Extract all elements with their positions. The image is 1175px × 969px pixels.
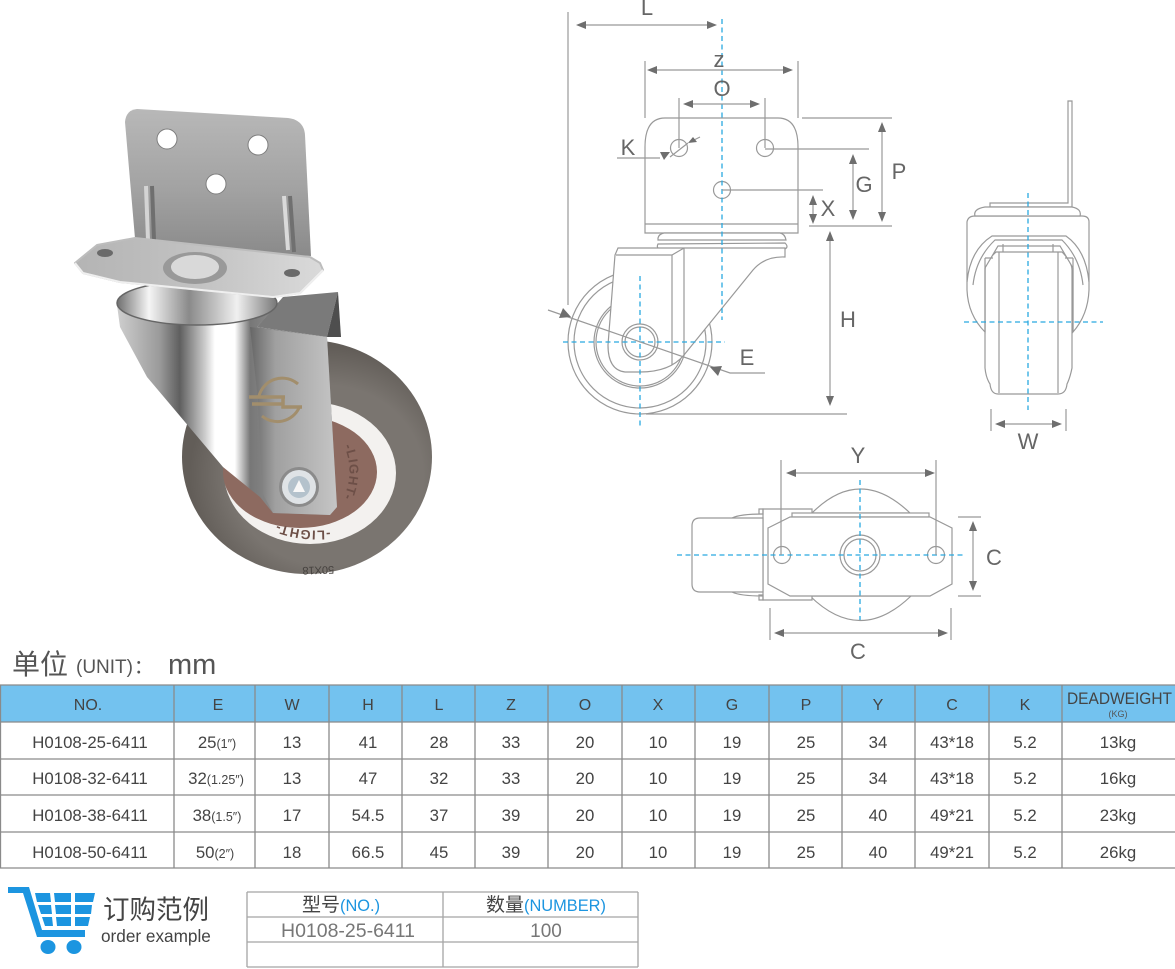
dimension G: G	[855, 172, 873, 197]
row H0108-50-6411: 20	[576, 843, 594, 862]
order table model value: H0108-25-6411	[281, 921, 415, 942]
base plate holes	[97, 249, 300, 277]
hub lettering lower: -LIGHT-	[276, 526, 330, 540]
row H0108-50-6411: 45	[430, 843, 448, 862]
side elevation drawing	[548, 0, 906, 426]
L bracket	[990, 101, 1072, 207]
plate strip	[792, 513, 929, 517]
front elevation drawing	[964, 101, 1103, 454]
row H0108-25-6411: 10	[649, 733, 667, 752]
hub lettering: -LIGHT-	[346, 445, 358, 498]
axle bolt	[279, 467, 319, 507]
order table grid	[247, 892, 638, 967]
table header labels: Z	[506, 697, 516, 714]
row H0108-25-6411: 33	[502, 733, 520, 752]
dimension C short	[958, 517, 1002, 596]
table header labels: L	[435, 697, 444, 714]
dimension O	[679, 76, 765, 148]
row H0108-50-6411: 66.5	[352, 843, 384, 862]
row H0108-25-6411: 19	[723, 733, 741, 752]
row H0108-25-6411: 13	[283, 733, 301, 752]
order example table	[247, 892, 638, 967]
dimension E: E	[740, 345, 754, 370]
top plan drawing	[677, 443, 1002, 664]
centre lines	[563, 19, 725, 426]
row H0108-38-6411: 23kg	[1100, 806, 1136, 825]
dimension H	[646, 231, 856, 414]
row H0108-32-6411: 25	[797, 769, 815, 788]
row H0108-50-6411: 40	[869, 843, 887, 862]
table header labels: NO.	[74, 697, 102, 714]
dimension H: H	[840, 307, 856, 332]
wheel	[985, 252, 1072, 394]
row H0108-25-6411: 34	[869, 733, 887, 752]
product photo: swivel caster	[74, 109, 432, 576]
table header labels: C	[946, 697, 958, 714]
axle bolt	[622, 324, 658, 360]
dimension G	[765, 149, 873, 220]
unit heading: (UNIT)	[76, 657, 133, 678]
row H0108-38-6411	[32, 806, 1136, 825]
row H0108-25-6411: 13kg	[1100, 733, 1136, 752]
unit heading: mm	[168, 649, 216, 681]
dimension W: W	[1018, 429, 1039, 454]
unit heading: 单位	[12, 649, 68, 680]
row H0108-50-6411: 19	[723, 843, 741, 862]
row H0108-50-6411: H0108-50-6411	[32, 843, 148, 862]
dimension C long: C	[850, 639, 866, 664]
plate holes	[157, 129, 268, 194]
order table header NUMBER: 数量(NUMBER)	[486, 894, 606, 916]
row H0108-32-6411	[32, 769, 1136, 788]
specification table	[0, 685, 1175, 868]
fork	[608, 248, 785, 372]
table header labels: Y	[873, 697, 884, 714]
table header labels: G	[726, 697, 738, 714]
plate fold line	[645, 223, 798, 225]
row H0108-25-6411: 25(1″)	[198, 733, 236, 752]
row H0108-32-6411: 19	[723, 769, 741, 788]
plate outline	[768, 517, 952, 596]
row H0108-32-6411: 16kg	[1100, 769, 1136, 788]
table header labels	[74, 689, 1172, 719]
fork rear side	[327, 292, 341, 337]
mount holes	[774, 546, 944, 564]
table header labels: P	[801, 697, 811, 714]
table header labels: H	[362, 697, 374, 714]
row H0108-50-6411: 50(2″)	[196, 843, 234, 862]
row H0108-32-6411: 10	[649, 769, 667, 788]
dimension Y: Y	[851, 443, 866, 468]
row H0108-25-6411: 43*18	[930, 733, 974, 752]
row H0108-25-6411: H0108-25-6411	[32, 733, 148, 752]
dimension W	[991, 409, 1066, 454]
row H0108-38-6411: 37	[430, 806, 448, 825]
table header labels: (KG)	[1108, 709, 1128, 719]
row H0108-38-6411: 10	[649, 806, 667, 825]
table header labels: E	[213, 697, 223, 714]
swivel rivet	[163, 252, 227, 284]
dimension Z	[645, 47, 798, 118]
row H0108-32-6411: 5.2	[1013, 769, 1037, 788]
dimension E	[548, 308, 765, 376]
dimension P: P	[892, 159, 906, 184]
order example heading: order example	[101, 926, 211, 946]
table header labels: K	[1020, 697, 1031, 714]
caster stem	[692, 518, 763, 592]
row H0108-32-6411: 13	[283, 769, 301, 788]
dimension Y	[781, 443, 936, 555]
logo	[249, 378, 302, 422]
fork right face	[250, 327, 337, 515]
plate ribs	[146, 186, 294, 252]
dimension C long	[770, 608, 951, 664]
row H0108-50-6411: 25	[797, 843, 815, 862]
row H0108-32-6411: 32(1.25″)	[188, 769, 244, 788]
inner arches	[967, 236, 1089, 332]
row H0108-32-6411: 43*18	[930, 769, 974, 788]
row H0108-50-6411: 5.2	[1013, 843, 1037, 862]
base plate	[75, 238, 323, 297]
fork fold lines	[616, 248, 684, 365]
swivel race	[117, 281, 277, 325]
row H0108-50-6411: 10	[649, 843, 667, 862]
row H0108-25-6411: 20	[576, 733, 594, 752]
row H0108-38-6411: 38(1.5″)	[193, 806, 241, 825]
wheel brown hub	[223, 416, 377, 528]
tyre size mark: 50X18	[302, 563, 334, 576]
row H0108-32-6411: 20	[576, 769, 594, 788]
row H0108-32-6411: 32	[430, 769, 448, 788]
dimension O: O	[713, 76, 731, 101]
row H0108-32-6411: 34	[869, 769, 887, 788]
row H0108-38-6411: 40	[869, 806, 887, 825]
washer	[975, 207, 1080, 216]
fork body	[117, 305, 337, 515]
dimension X	[722, 190, 836, 224]
row H0108-50-6411: 18	[283, 843, 301, 862]
table header labels: O	[579, 697, 591, 714]
row H0108-38-6411: 20	[576, 806, 594, 825]
row H0108-38-6411: 54.5	[352, 806, 384, 825]
row H0108-25-6411: 28	[430, 733, 448, 752]
icon: shopping cart	[8, 887, 95, 954]
base plate lower edge	[75, 263, 323, 297]
row H0108-38-6411: 17	[283, 806, 301, 825]
row H0108-38-6411: 25	[797, 806, 815, 825]
row H0108-50-6411: 39	[502, 843, 520, 862]
row H0108-38-6411: 39	[502, 806, 520, 825]
fork arches	[967, 216, 1089, 332]
order example heading: 订购范例	[103, 895, 209, 925]
caster wheel outline	[568, 270, 712, 414]
wheel tread lines	[999, 252, 1058, 393]
wheel white ring	[224, 402, 396, 544]
swivel washers	[657, 233, 787, 249]
row H0108-50-6411: 49*21	[930, 843, 974, 862]
centre rivet	[840, 535, 880, 575]
row H0108-38-6411: 5.2	[1013, 806, 1037, 825]
row H0108-25-6411: 25	[797, 733, 815, 752]
mounting plate	[645, 118, 798, 233]
order table header NO: 型号(NO.)	[302, 894, 380, 916]
order example heading	[101, 895, 211, 946]
wheel tyre	[182, 340, 432, 574]
vertical mounting plate	[125, 109, 311, 256]
table header labels: X	[653, 697, 664, 714]
row H0108-32-6411: 33	[502, 769, 520, 788]
order table quantity value: 100	[530, 921, 562, 942]
dimension K	[617, 135, 700, 160]
dimension X: X	[821, 196, 836, 221]
dimension K: K	[621, 135, 636, 160]
row H0108-38-6411: 49*21	[930, 806, 974, 825]
dimension L	[568, 0, 717, 305]
row H0108-38-6411: 19	[723, 806, 741, 825]
fork housing	[763, 509, 812, 600]
centre lines	[964, 193, 1103, 410]
fork tabs	[732, 509, 763, 600]
dimension C short: C	[986, 545, 1002, 570]
row H0108-25-6411	[32, 733, 1136, 752]
unit heading: ：	[134, 657, 153, 678]
plate holes	[670, 140, 774, 198]
table grid	[0, 685, 1175, 868]
row H0108-32-6411: H0108-32-6411	[32, 769, 148, 788]
row H0108-38-6411: H0108-38-6411	[32, 806, 148, 825]
fork rear tab	[257, 292, 338, 337]
row H0108-32-6411: 47	[359, 769, 377, 788]
dimension P	[802, 118, 906, 226]
row H0108-50-6411	[32, 843, 1136, 862]
centre lines	[677, 480, 965, 620]
table header band	[0, 685, 1175, 722]
row H0108-25-6411: 41	[359, 733, 377, 752]
row H0108-50-6411: 26kg	[1100, 843, 1136, 862]
row H0108-25-6411: 5.2	[1013, 733, 1037, 752]
dimension Z: z	[714, 47, 724, 72]
wheel arcs	[810, 489, 911, 620]
table header labels: W	[284, 697, 300, 714]
